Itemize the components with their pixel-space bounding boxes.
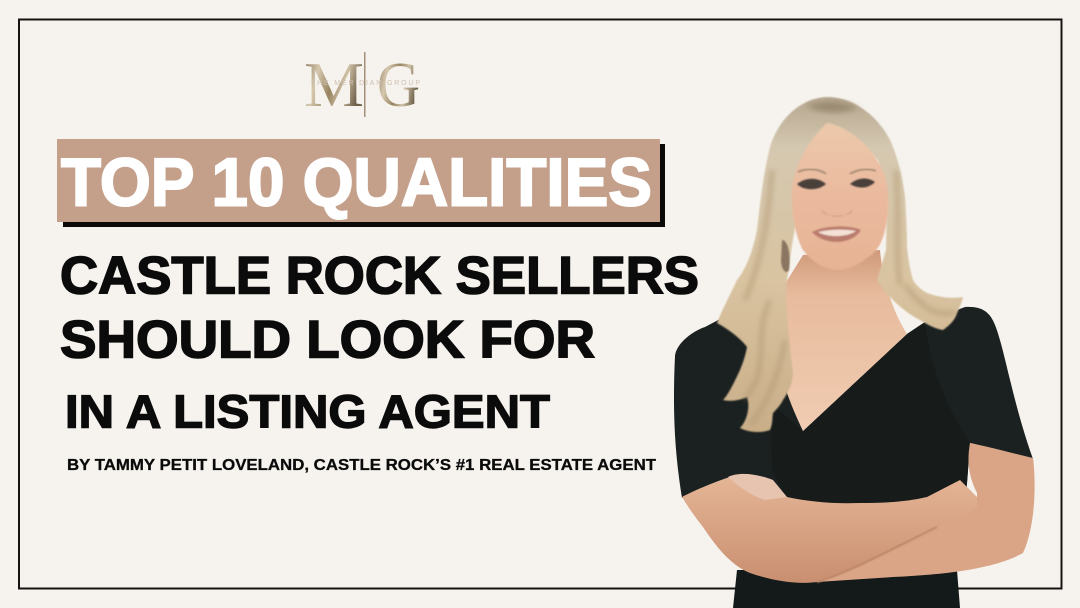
dress top and sleeves	[674, 300, 1033, 510]
heading line: In a Listing Agent: IN A LISTING AGENT	[65, 386, 550, 438]
portrait of agent	[674, 97, 1035, 608]
dress centre panel	[770, 322, 970, 505]
dress skirt	[733, 570, 960, 608]
face	[792, 123, 888, 270]
nose	[821, 209, 853, 216]
heading line: Should Look For: SHOULD LOOK FOR	[60, 310, 595, 370]
hair root shadow	[806, 102, 858, 112]
logo: The Meridian Group: G	[377, 50, 420, 120]
logo: The Meridian Group	[304, 50, 420, 120]
smile	[812, 226, 861, 242]
fingers	[728, 474, 787, 500]
eyes	[797, 178, 875, 189]
hair strands	[745, 170, 955, 425]
heading banner: Top 10 Qualities: TOP 10 QUALITIES	[61, 144, 652, 220]
logo: The Meridian Group: THE MERIDIAN GROUP	[311, 80, 420, 87]
arm crease	[817, 527, 937, 582]
logo: The Meridian Group: M	[304, 50, 364, 120]
heading line: Castle Rock Sellers: CASTLE ROCK SELLERS	[60, 246, 699, 306]
eyebrows	[798, 169, 876, 174]
byline: BY TAMMY PETIT LOVELAND, CASTLE ROCK’S #1 REAL ESTATE AGENT	[67, 457, 656, 474]
hair	[717, 97, 963, 432]
earring	[781, 240, 790, 272]
chest	[775, 250, 907, 431]
left arm	[682, 477, 977, 583]
right arm	[817, 443, 1035, 582]
